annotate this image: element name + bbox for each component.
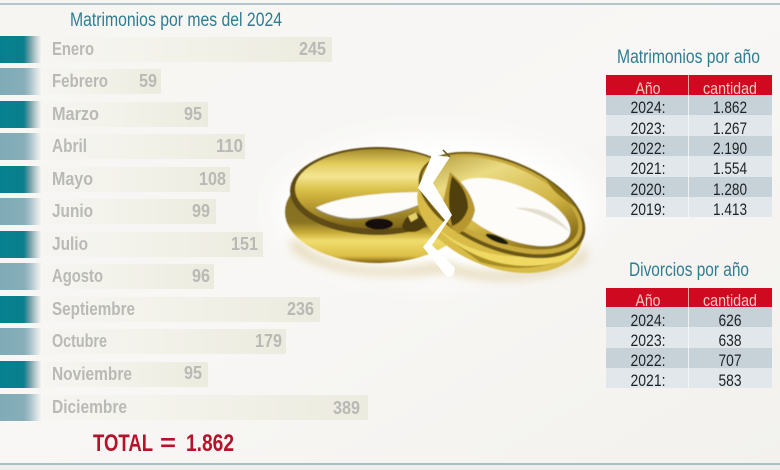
total: 1.862 — [186, 430, 234, 457]
table header — [606, 288, 772, 310]
row 2020: 1.280 — [713, 180, 747, 199]
row: Octubre — [0, 328, 286, 355]
row 2022: 2.190 — [713, 139, 747, 158]
row: Febrero: Febrero — [52, 71, 108, 91]
top rule — [0, 3, 780, 5]
row: Mayo: Mayo — [52, 169, 93, 189]
heading: divorces per year: Divorcios por año — [629, 260, 749, 281]
row: Diciembre — [0, 394, 368, 421]
bottom band — [0, 463, 780, 470]
row: Septiembre — [0, 296, 320, 323]
row 2024 — [606, 307, 772, 330]
crack — [418, 155, 455, 277]
row: Septiembre: Septiembre — [52, 299, 135, 319]
row 2021: 2021: — [630, 159, 666, 178]
row 2021: 583 — [718, 371, 742, 390]
row: Mayo: 108 — [199, 169, 226, 189]
table: divorces per year — [606, 288, 772, 390]
table header: Año — [636, 79, 660, 98]
row: Septiembre: 236 — [287, 299, 314, 319]
row 2022: 2022: — [630, 139, 666, 158]
row 2021 — [606, 156, 772, 178]
row: Noviembre: Noviembre — [52, 364, 132, 384]
table header: cantidad — [703, 79, 757, 98]
row: Abril — [0, 133, 245, 160]
row 2022 — [606, 348, 772, 370]
row: Enero: 245 — [299, 39, 326, 59]
row 2021 — [606, 368, 772, 390]
row: Mayo — [0, 166, 230, 193]
table: marriages per year — [606, 75, 772, 219]
ring shadow — [292, 235, 586, 280]
table header: cantidad — [703, 291, 757, 310]
row 2021: 1.554 — [713, 159, 747, 178]
row: Julio: Julio — [52, 234, 88, 254]
row: Julio: 151 — [231, 234, 258, 254]
heading: monthly marriages: Matrimonios por mes del 2024 — [70, 10, 282, 31]
row: Abril: Abril — [52, 136, 87, 156]
row 2019: 1.413 — [713, 200, 747, 219]
bottom rule line — [0, 463, 780, 465]
row 2023 — [606, 115, 772, 138]
total: TOTAL — [93, 430, 153, 457]
row: Julio — [0, 231, 263, 258]
row: Enero: Enero — [52, 39, 94, 59]
row 2024 — [606, 95, 772, 117]
row 2020: 2020: — [630, 180, 666, 199]
row 2023: 2023: — [630, 119, 666, 138]
white glow behind rings — [276, 136, 596, 280]
total — [93, 430, 234, 457]
row: Octubre: 179 — [255, 331, 282, 351]
row: Agosto — [0, 263, 214, 290]
row 2020 — [606, 177, 772, 199]
row: Febrero: 59 — [139, 71, 157, 91]
right ring — [401, 130, 600, 294]
row 2024: 626 — [718, 311, 742, 330]
row: Noviembre: 95 — [184, 363, 202, 383]
row 2021: 2021: — [630, 371, 666, 390]
row 2024: 2024: — [630, 98, 666, 117]
row 2022: 2022: — [630, 351, 666, 370]
left ring — [285, 147, 469, 263]
row: Marzo: 95 — [184, 104, 202, 124]
row: Octubre: Octubre — [52, 331, 107, 351]
row: Diciembre: Diciembre — [52, 397, 127, 417]
row 2023: 2023: — [630, 331, 666, 350]
row: Marzo — [0, 101, 208, 128]
row 2019: 2019: — [630, 200, 666, 219]
icon: broken wedding rings — [276, 130, 600, 294]
row: Agosto: Agosto — [52, 266, 103, 286]
row 2022 — [606, 136, 772, 158]
row: Junio: 99 — [192, 201, 210, 221]
row 2024: 1.862 — [713, 98, 747, 117]
table header — [606, 75, 772, 98]
row 2023: 638 — [718, 331, 742, 350]
row 2023 — [606, 327, 772, 350]
row: Febrero — [0, 68, 161, 95]
row: Noviembre — [0, 361, 208, 388]
row 2024: 2024: — [630, 311, 666, 330]
crack tip — [443, 150, 450, 157]
row: Agosto: 96 — [192, 266, 210, 286]
bar chart: marriages per month — [0, 36, 368, 421]
row 2022: 707 — [718, 351, 742, 370]
row: Junio: Junio — [52, 201, 93, 221]
row: Junio — [0, 198, 216, 225]
row 2019 — [606, 197, 772, 219]
row: Diciembre: 389 — [333, 398, 360, 418]
row: Marzo: Marzo — [52, 104, 99, 124]
row: Enero — [0, 36, 332, 63]
row: Abril: 110 — [216, 136, 243, 156]
table header: Año — [636, 291, 660, 310]
total: = — [160, 430, 176, 457]
row 2023: 1.267 — [713, 119, 747, 138]
